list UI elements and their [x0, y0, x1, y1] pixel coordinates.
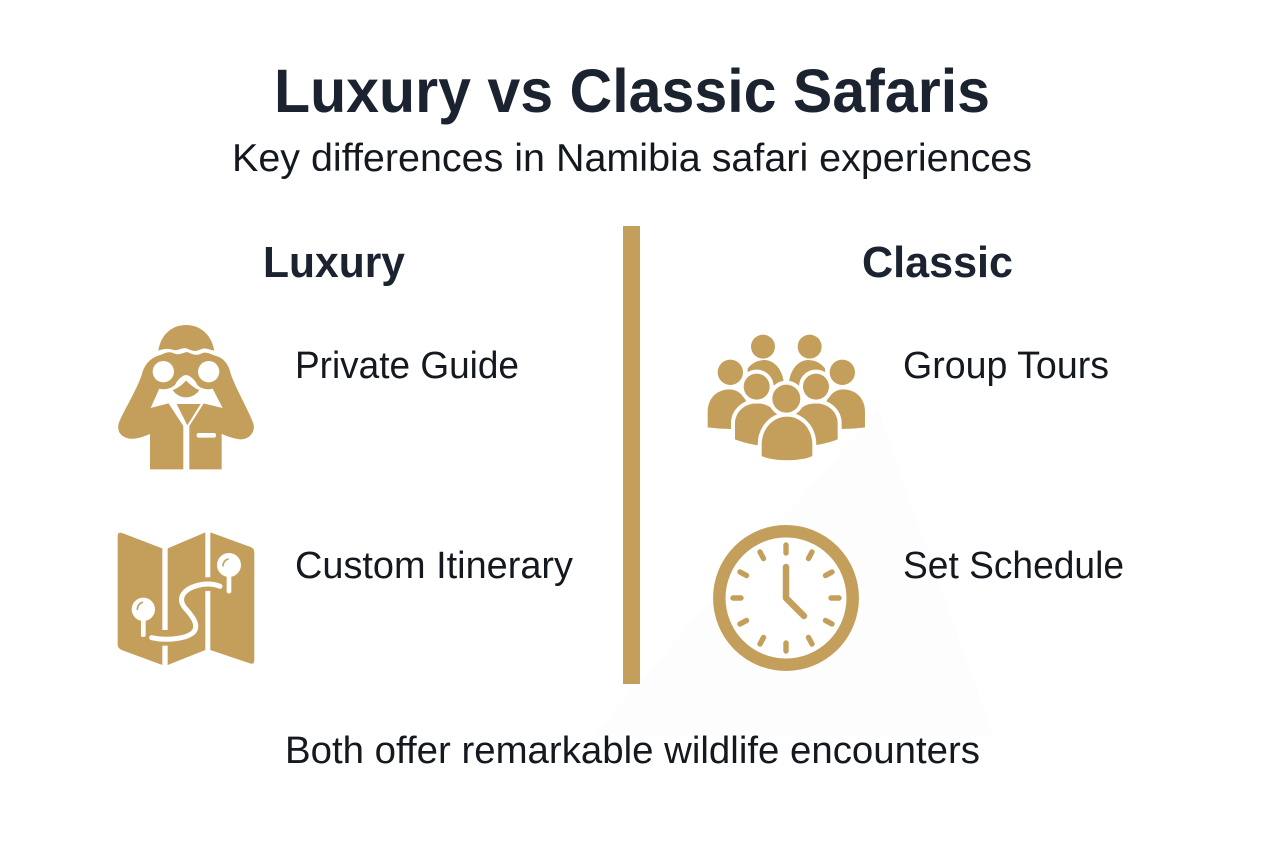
label: custom itinerary: Custom Itinerary: [295, 545, 573, 587]
heading: luxury: Luxury: [263, 238, 406, 287]
label: set schedule: Set Schedule: [903, 545, 1124, 587]
label: group tours: Group Tours: [903, 345, 1109, 387]
icon: group of people: [708, 335, 865, 460]
icon: folded map with route: [118, 532, 254, 665]
icon: clock: [719, 531, 853, 665]
icon: guide with binoculars: [118, 325, 254, 472]
heading: classic: Classic: [862, 238, 1013, 287]
footer note: Both offer remarkable wildlife encounters: [285, 730, 980, 772]
divider: [623, 226, 640, 684]
subtitle: Key differences in Namibia safari experiences: [232, 137, 1032, 180]
panel: classic: [708, 238, 1124, 665]
title: Luxury vs Classic Safaris: [274, 57, 990, 125]
panel: luxury: [118, 238, 573, 665]
label: private guide: Private Guide: [295, 345, 519, 387]
